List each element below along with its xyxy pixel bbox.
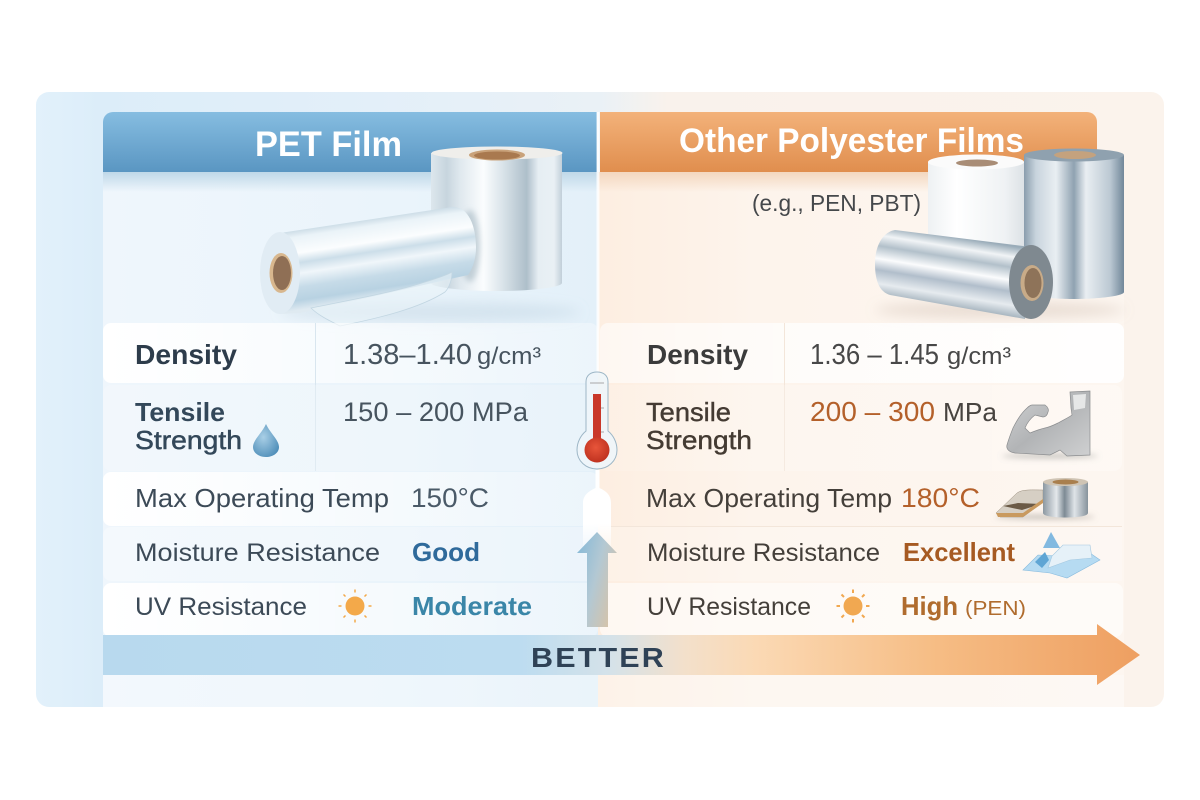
row: max operating temp: Max Operating Temp [135,483,389,513]
icon: sun, other films [836,590,870,622]
row: tensile strength: MPa [943,397,998,427]
row: UV resistance: Moderate [412,591,532,621]
arrow: better, horizontal: BETTER [531,642,666,673]
row: UV resistance: UV Resistance [135,593,307,621]
header: Other Polyester Films: Other Polyester Films [679,122,1024,160]
subtitle: examples: (e.g., PEN, PBT) [752,190,921,216]
white column behind up arrow [583,470,611,560]
row: density: g/cm³ [947,343,1011,370]
row: density: Density [647,339,748,370]
image: clear PET film rolls [260,146,580,326]
row: tensile strength: Strength [646,425,752,455]
row: max operating temp: 180°C [901,483,980,513]
row: tensile strength: Strength [135,425,242,455]
row: moisture resistance: Good [412,537,480,567]
row: density: 1.38–1.40 [343,339,472,371]
center divider [596,112,600,374]
icon: thermometer [577,372,617,469]
row: UV resistance: (PEN) [965,598,1026,620]
row: moisture resistance: Moisture Resistance [135,539,380,567]
row: tensile strength: 200 – 300 [810,396,935,427]
row: density: 1.36 – 1.45 [810,339,939,371]
row: moisture resistance: Moisture Resistance [647,539,880,567]
row: tensile strength: Tensile [135,397,225,427]
row: density: g/cm³ [477,343,541,370]
row: density: Density [135,339,237,370]
icon: sun, PET [338,590,372,622]
row: UV resistance [103,583,1123,637]
arrow: better, horizontal [103,624,1140,685]
row: max operating temp [103,472,1122,527]
icon: water drop [253,424,279,457]
row: density [103,323,1124,471]
row: tensile strength: 150 – 200 MPa [343,397,529,427]
row: tensile strength: Tensile [646,397,731,427]
icon: film roll and sheet [995,478,1095,520]
image: silver polyester film rolls [875,148,1125,319]
icon: water-resistant film [1023,532,1100,578]
header: PET Film [103,112,597,172]
header: PET Film: PET Film [255,125,402,164]
row: max operating temp: Max Operating Temp [646,483,892,513]
row: max operating temp: 150°C [411,483,489,513]
icon: flexed arm [1002,391,1098,458]
header: Other Polyester Films [600,112,1097,172]
row: UV resistance: High [901,591,958,621]
row: moisture resistance: Excellent [903,537,1015,567]
arrow: up [577,532,617,627]
row: moisture resistance [103,527,1122,581]
row: UV resistance: UV Resistance [647,593,811,621]
main panel background [36,92,1164,707]
row: tensile strength [103,385,1122,471]
